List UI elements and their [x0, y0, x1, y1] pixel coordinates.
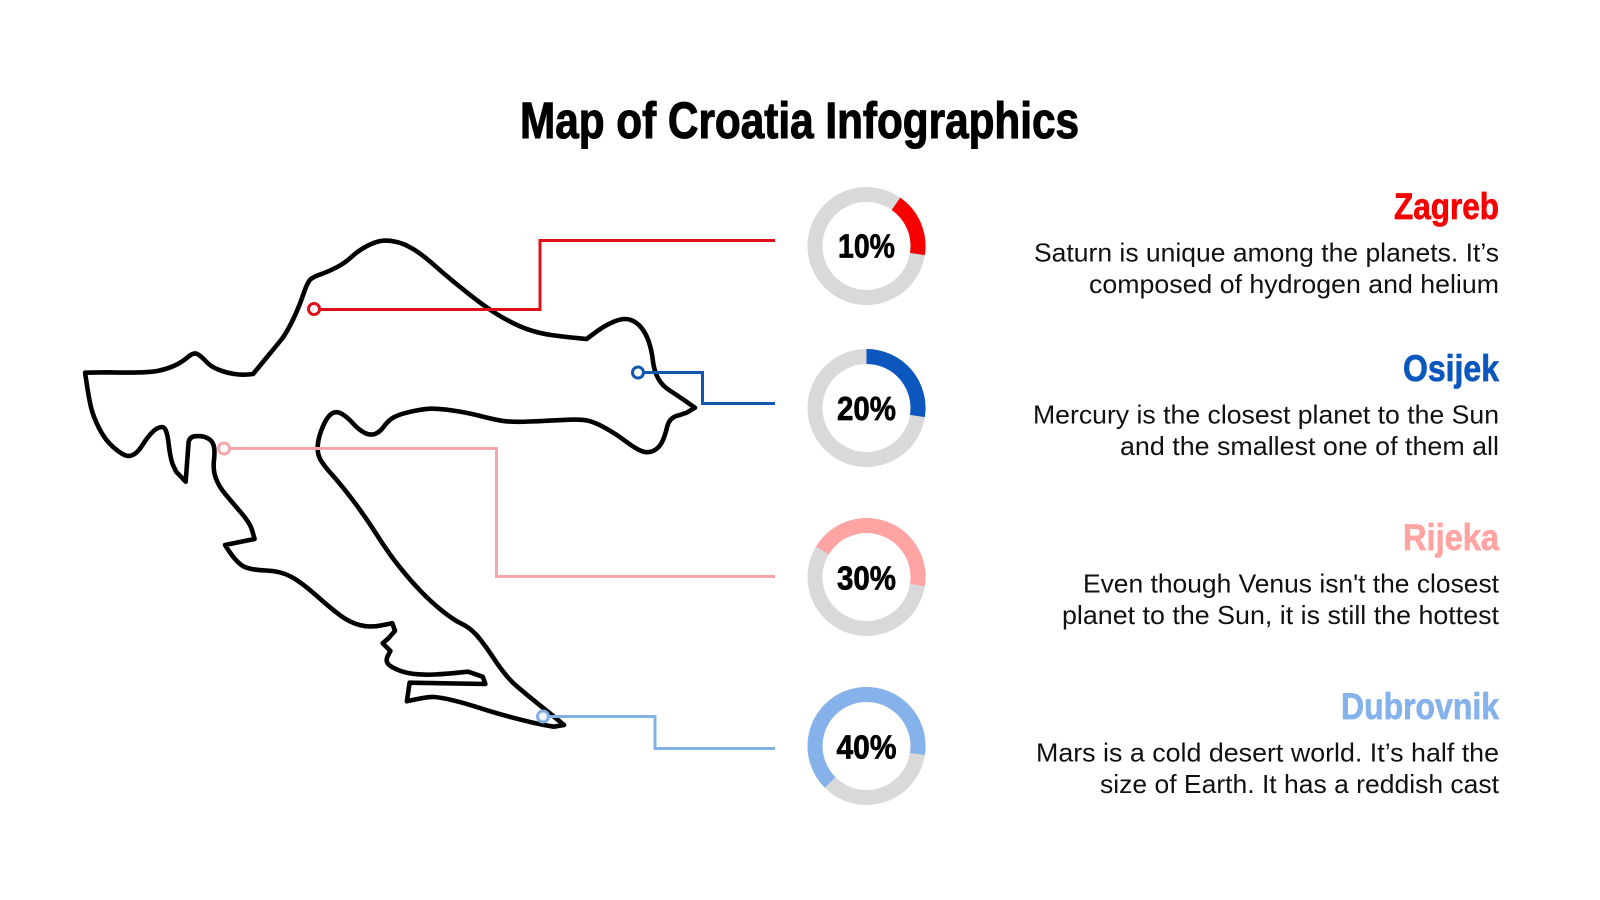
description: Osijek: and the smallest one of them all: [1120, 431, 1499, 461]
donut chart: Zagreb 10%: [815, 194, 918, 298]
percent: 10%: 10%: [838, 228, 895, 264]
connector: Osijek: [632, 367, 775, 404]
text block: Osijek: [1033, 348, 1499, 461]
connector: Zagreb: [308, 240, 775, 314]
description: Dubrovnik: Mars is a cold desert world. It’s half the: [1036, 738, 1499, 768]
description: Rijeka: planet to the Sun, it is still the hottest: [1062, 600, 1500, 630]
description: Rijeka: [1062, 568, 1500, 630]
description: Dubrovnik: size of Earth. It has a reddish cast: [1100, 769, 1500, 799]
title: Map of Croatia Infographics: [520, 92, 1079, 149]
map of Croatia outline: [85, 241, 695, 727]
heading: Dubrovnik: Dubrovnik: [1341, 686, 1499, 727]
heading: Osijek: Osijek: [1403, 348, 1499, 389]
donut chart: Osijek 20%: [815, 356, 918, 460]
donut chart: Dubrovnik 40%: [815, 694, 918, 798]
description: Rijeka: Even though Venus isn't the closest: [1083, 568, 1500, 598]
description: Zagreb: composed of hydrogen and helium: [1089, 269, 1499, 299]
text block: Dubrovnik: [1036, 686, 1500, 799]
description: Osijek: Mercury is the closest planet to the Sun: [1033, 400, 1499, 430]
connector: Dubrovnik: [538, 711, 775, 748]
description: Zagreb: Saturn is unique among the planets. It’s: [1034, 238, 1499, 268]
text block: Rijeka: [1062, 517, 1500, 630]
percent: 20%: 20%: [837, 390, 896, 427]
donut chart: Rijeka 30%: [815, 526, 918, 628]
description: Osijek: [1033, 400, 1499, 461]
text block: Zagreb: [1034, 186, 1499, 299]
description: Dubrovnik: [1036, 738, 1500, 799]
percent: 30%: 30%: [837, 560, 896, 596]
percent: 40%: 40%: [836, 728, 896, 766]
connector: Rijeka: [218, 443, 775, 576]
description: Zagreb: [1034, 238, 1499, 299]
heading: Rijeka: Rijeka: [1403, 517, 1499, 558]
heading: Zagreb: Zagreb: [1394, 186, 1499, 227]
